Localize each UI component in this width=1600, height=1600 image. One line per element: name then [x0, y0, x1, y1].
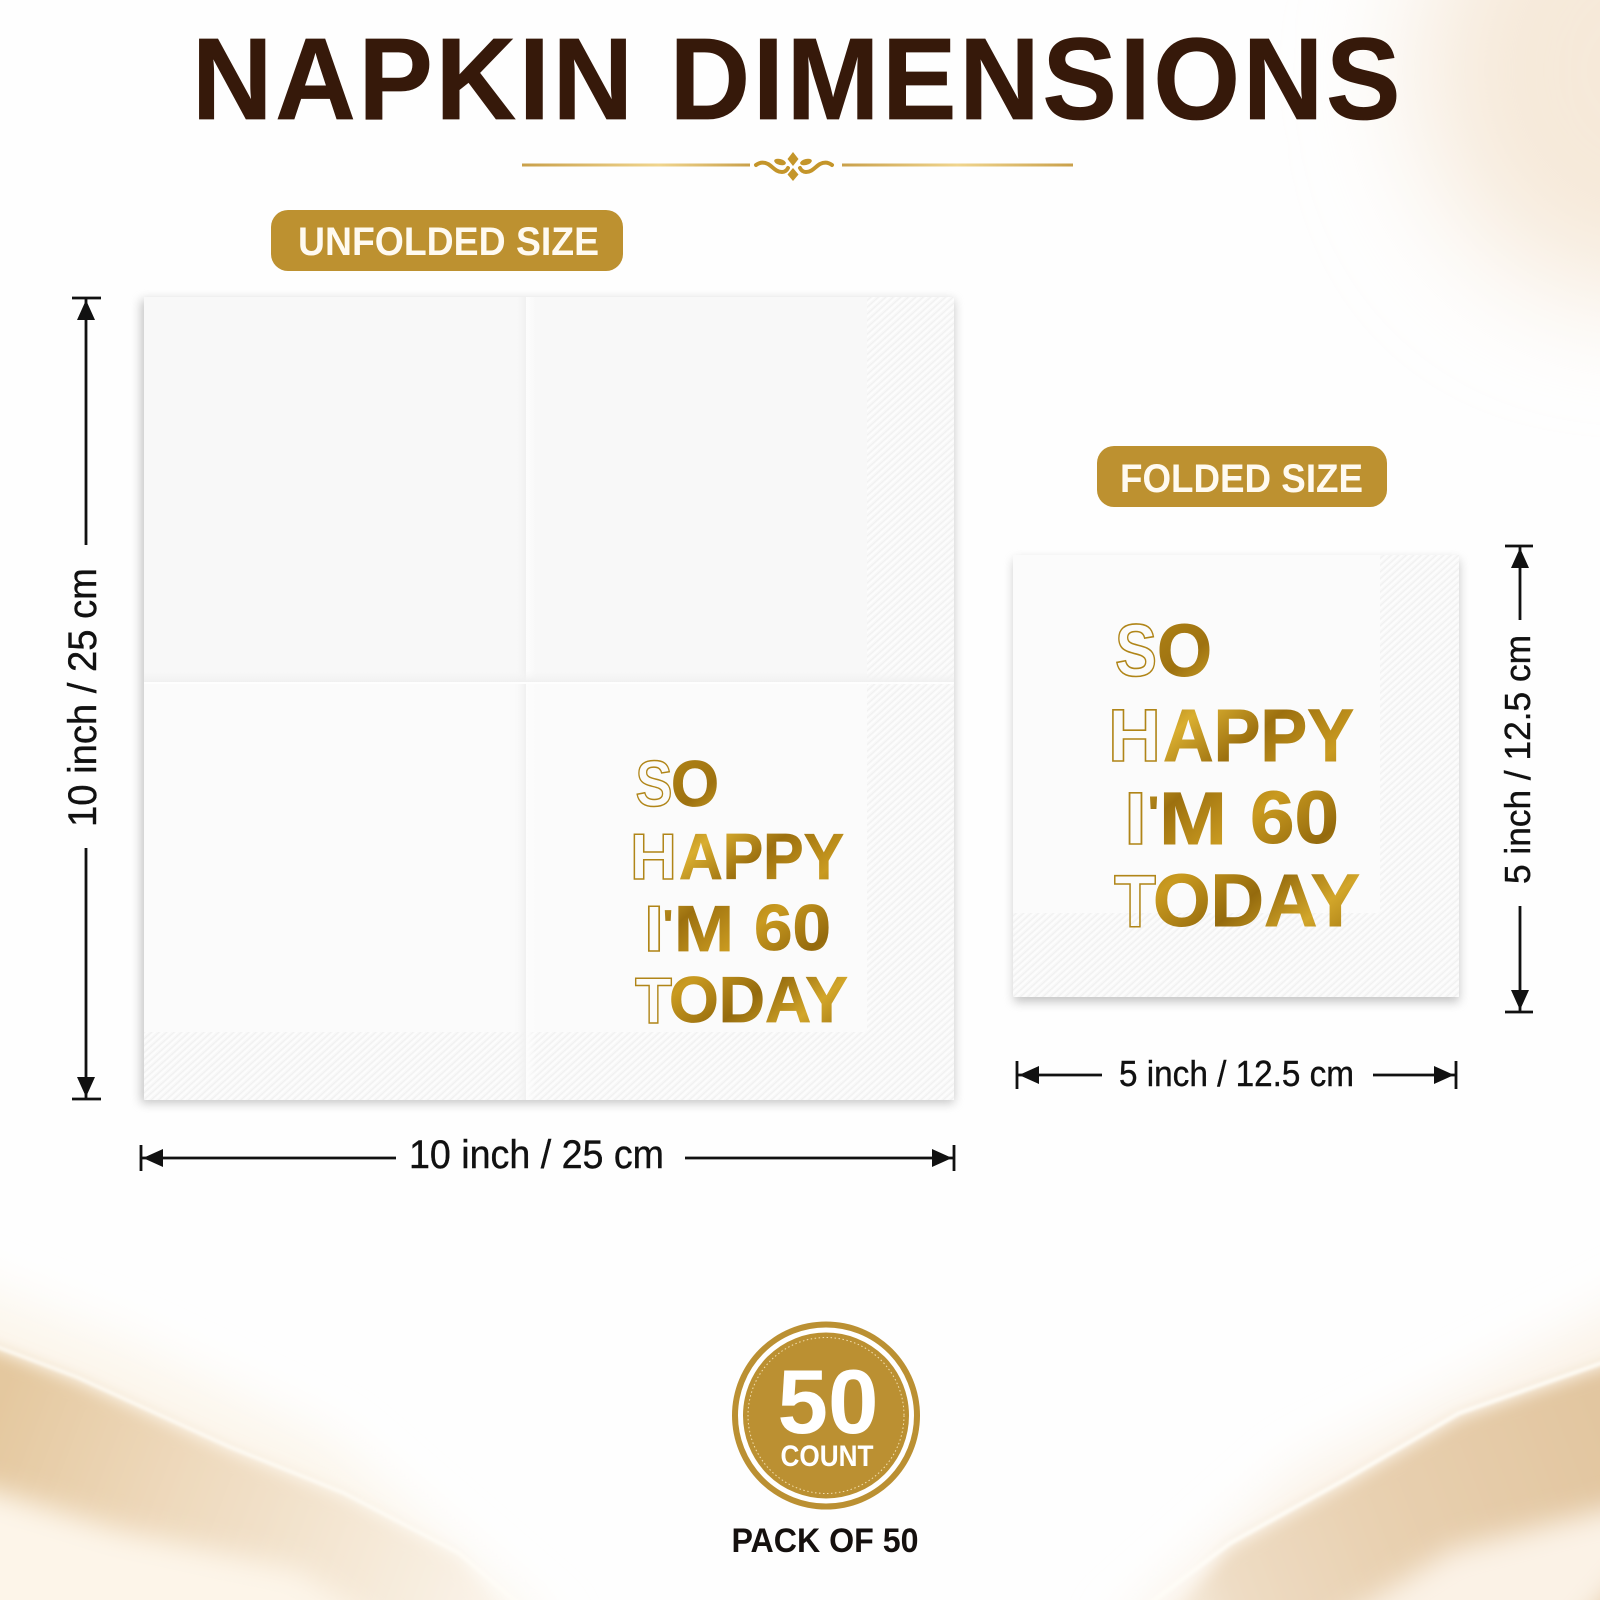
napkin print: so happy i'm 60 today: [630, 747, 848, 1037]
napkin print: so happy i'm 60 today: APPY: [1163, 694, 1354, 777]
seal: 50 count: COUNT: [780, 1440, 874, 1473]
napkin print: so happy i'm 60 today: H: [1108, 694, 1161, 777]
dimension arrow: folded width: [1017, 1053, 1456, 1094]
panel: folded napkin: [1013, 555, 1459, 1002]
decorative divider with ornament: [522, 152, 1073, 181]
napkin print: so happy i'm 60 today: M: [1159, 777, 1227, 860]
napkin print: so happy i'm 60 today: O: [1157, 609, 1212, 692]
napkin print: so happy i'm 60 today: I: [644, 892, 664, 965]
napkin print: so happy i'm 60 today: S: [1115, 609, 1157, 692]
dimension arrow: folded width: 5 inch / 12.5 cm: [1119, 1053, 1354, 1094]
napkin print: so happy i'm 60 today: H: [630, 820, 677, 893]
seal: 50 count: 50: [778, 1352, 878, 1453]
napkin print: so happy i'm 60 today: 60: [1250, 776, 1339, 859]
dimension arrow: unfolded width: [141, 1133, 954, 1177]
caption: pack of 50: PACK OF 50: [732, 1522, 918, 1560]
dimension arrow: unfolded height: 10 inch / 25 cm: [61, 568, 105, 827]
napkin print: so happy i'm 60 today: ': [1148, 787, 1159, 839]
napkin print: so happy i'm 60 today: 60: [754, 891, 831, 964]
badge: folded size: [1097, 446, 1387, 507]
napkin print: so happy i'm 60 today: [1108, 609, 1360, 943]
title: NAPKIN DIMENSIONS: [192, 15, 1403, 145]
dimension arrow: folded height: 5 inch / 12.5 cm: [1497, 635, 1538, 884]
napkin print: so happy i'm 60 today: APPY: [679, 820, 844, 893]
napkin print: so happy i'm 60 today: M: [674, 892, 734, 965]
panel: unfolded napkin: [141, 297, 954, 1103]
badge: unfolded size: UNFOLDED SIZE: [298, 220, 599, 264]
napkin print: so happy i'm 60 today: I: [1124, 777, 1147, 860]
badge: folded size: FOLDED SIZE: [1120, 457, 1363, 501]
napkin print: so happy i'm 60 today: T: [1114, 860, 1156, 943]
seal: 50 count: [732, 1322, 920, 1510]
napkin print: so happy i'm 60 today: S: [636, 747, 672, 820]
dimension arrow: unfolded height: [61, 298, 105, 1099]
napkin print: so happy i'm 60 today: ODAY: [1153, 859, 1360, 942]
dimension arrow: folded height: [1497, 546, 1538, 1012]
napkin print: so happy i'm 60 today: ': [663, 903, 673, 947]
napkin print: so happy i'm 60 today: ODAY: [669, 963, 848, 1036]
dimension arrow: unfolded width: 10 inch / 25 cm: [409, 1133, 664, 1177]
napkin print: so happy i'm 60 today: O: [671, 747, 719, 820]
badge: unfolded size: [271, 210, 623, 271]
napkin print: so happy i'm 60 today: T: [635, 964, 672, 1037]
